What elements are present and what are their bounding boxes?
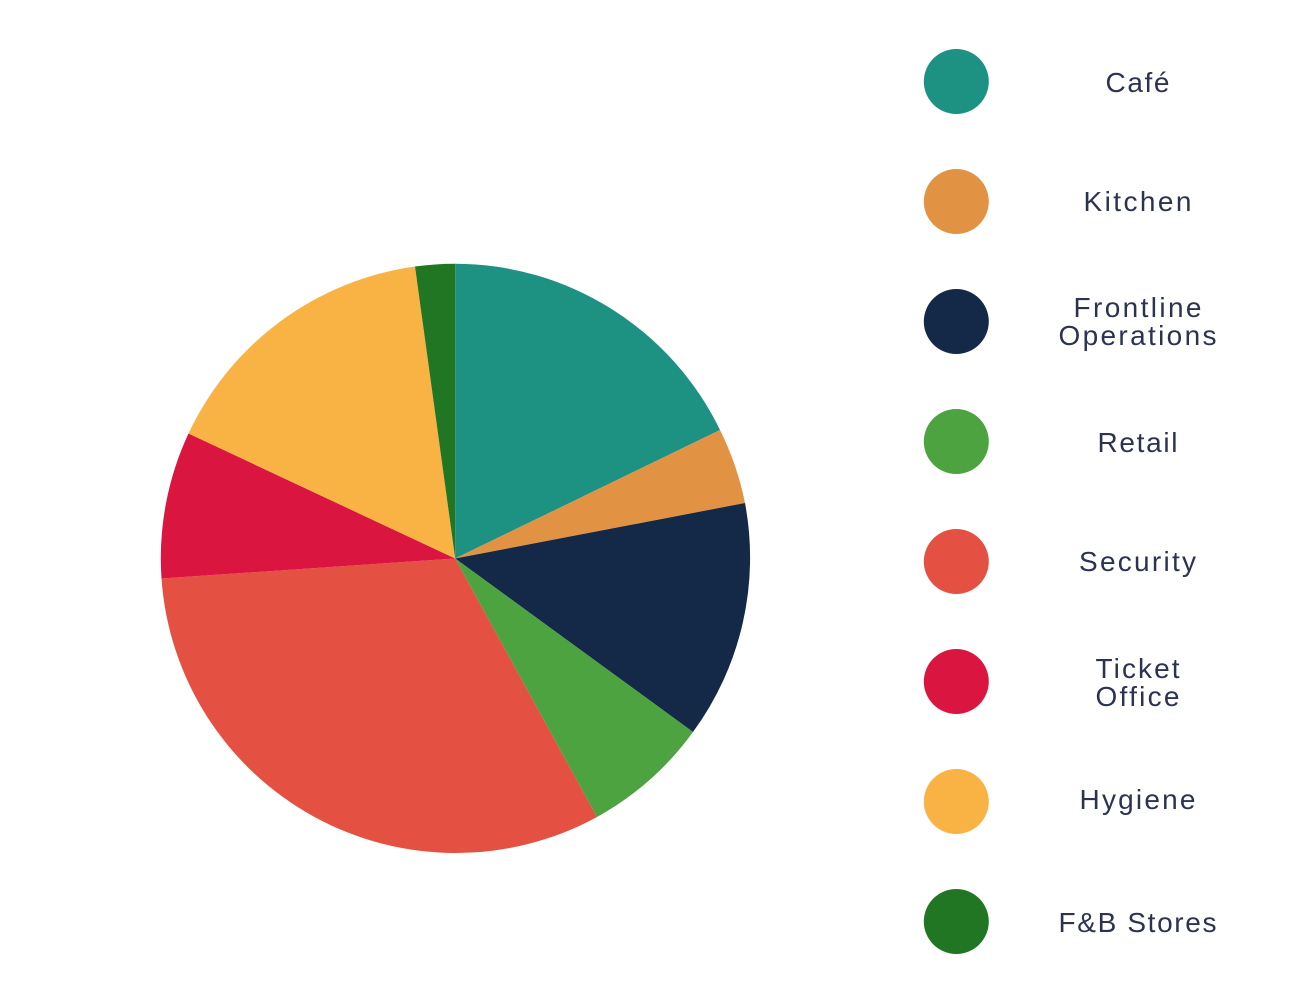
legend item: Café	[924, 49, 1170, 114]
slice: Kitchen	[455, 430, 745, 558]
legend item: Security: Security	[1079, 546, 1196, 577]
slice: Ticket Office	[161, 434, 455, 578]
legend item: Frontline Operations: Frontline	[1074, 292, 1202, 323]
legend item: Security	[924, 529, 1196, 594]
slice: Retail	[455, 558, 693, 817]
legend item: Retail: Retail	[1098, 427, 1178, 458]
slice: Hygiene	[188, 266, 455, 558]
slice: Frontline Operations	[455, 503, 750, 732]
legend item: Retail	[924, 409, 1178, 474]
legend item: F&B Stores: F&B Stores	[1058, 907, 1216, 938]
legend item: Café: Café	[1106, 67, 1170, 98]
legend item: Hygiene: Hygiene	[1080, 784, 1196, 815]
legend item: Frontline Operations	[924, 289, 1216, 354]
legend	[924, 49, 1216, 954]
legend item: F&B Stores	[924, 889, 1216, 954]
slice: Security	[162, 558, 597, 853]
legend item: Hygiene	[924, 769, 1196, 834]
slice: F&B Stores	[415, 264, 455, 558]
legend item: Frontline Operations: Operations	[1058, 320, 1216, 351]
legend item: Ticket Office: Ticket	[1096, 653, 1180, 684]
legend item: Ticket Office: Office	[1096, 681, 1180, 712]
pie chart	[161, 264, 750, 853]
slice: Café	[455, 264, 720, 558]
legend item: Ticket Office	[924, 649, 1180, 714]
legend item: Kitchen	[924, 169, 1192, 234]
legend item: Kitchen: Kitchen	[1084, 186, 1192, 217]
